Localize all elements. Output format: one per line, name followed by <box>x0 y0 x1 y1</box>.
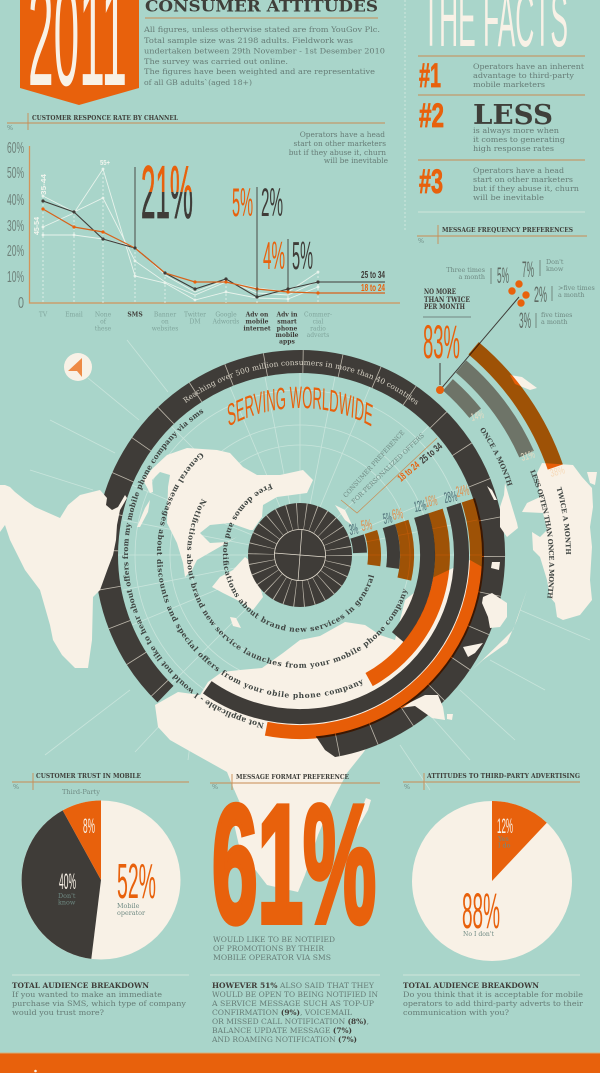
panel: customer response rate chart: Twitter <box>184 312 206 318</box>
pie chart: attitudes: I do <box>498 842 511 850</box>
panel: customer response rate chart: 30% <box>7 218 24 235</box>
panel: customer response rate chart: 2% <box>261 181 283 225</box>
pie chart: trust: 8% <box>83 815 95 838</box>
panel: message format preference: % <box>212 783 218 791</box>
title and survey notes: The figures have been weighted and are representative <box>144 67 375 76</box>
panel: message format preference: CONFIRMATION (9%), VOICEMAIL <box>212 1008 352 1017</box>
pie chart: trust: 52% <box>117 855 156 909</box>
panel: message frequency preferences: 5% <box>497 263 509 288</box>
curved chart labels: Notifictions about brand new service launches from your mobile phone company <box>186 498 408 669</box>
panel: attitudes to third-party advertising: % <box>404 783 410 791</box>
percentage labels on bars: 5% <box>382 510 394 528</box>
pie chart: trust: 40% <box>59 869 76 894</box>
curved chart labels <box>122 361 418 728</box>
panel: customer response rate chart: 20% <box>7 243 24 260</box>
panel: customer response rate chart: apps <box>279 338 295 346</box>
panel: customer response rate chart: 55+ <box>100 160 110 167</box>
consumer preference legend: 18 to 24 <box>396 460 422 484</box>
percentage labels on bars: 6% <box>391 505 405 524</box>
panel: the facts: is always more when <box>473 126 559 135</box>
panel: customer response rate chart: 40% <box>7 192 24 209</box>
panel: customer response rate chart: start on other marketers <box>294 139 386 148</box>
panel: the facts <box>418 0 585 212</box>
percentage labels on bars: 28% <box>443 488 458 507</box>
panel: the facts: #2 <box>419 97 444 135</box>
consumer preference legend <box>341 428 445 513</box>
panel: customer response rate chart: smart <box>277 318 297 326</box>
panel: the facts: #3 <box>419 163 443 201</box>
panel: customer response rate chart: on <box>161 318 169 326</box>
panel: attitudes to third-party advertising <box>403 773 583 1017</box>
panel: message frequency preferences: 38% <box>549 464 566 480</box>
pie chart: attitudes: 12% <box>497 815 513 838</box>
panel: customer response rate chart: cial <box>313 318 323 326</box>
consumer preference legend: FOR PERSONALIZED OFFERS <box>350 432 426 505</box>
panel: message frequency preferences: NO MORE <box>424 287 456 296</box>
panel: the facts: but if they abuse it, churn <box>473 184 579 193</box>
outer ring <box>107 362 494 748</box>
panel: message frequency preferences: 3% <box>519 308 531 333</box>
panel: message format preference: HOWEVER 51% ALSO SAID THAT THEY <box>212 981 374 990</box>
panel: customer response rate chart: adverts <box>307 332 329 339</box>
panel: customer trust in mobile <box>12 773 189 1017</box>
panel: customer response rate chart: 50% <box>7 165 24 182</box>
panel: customer response rate chart: Adwords <box>212 318 239 326</box>
pie chart: attitudes: 88% <box>462 883 500 939</box>
pie chart: trust <box>22 800 180 960</box>
panel: customer response rate chart: DM <box>190 318 200 326</box>
panel: customer response rate chart: phone <box>277 326 298 332</box>
panel: customer response rate chart: TV <box>39 312 48 318</box>
panel: the facts: #1 <box>419 57 441 95</box>
panel: message format preference: OF PROMOTIONS BY THEIR <box>213 944 324 953</box>
panel: message frequency preferences: know <box>546 265 564 273</box>
panel: customer response rate chart: websites <box>152 326 178 332</box>
panel: customer response rate chart: mobile <box>246 318 269 326</box>
panel: message frequency preferences: ONCE A MONTH <box>480 428 512 486</box>
panel: message frequency preferences: % <box>418 237 424 245</box>
heading: serving worldwide: SERVING WORLDWIDE <box>228 386 373 426</box>
panel: the facts: advantage to third-party <box>473 71 575 80</box>
panel: customer response rate chart: 10% <box>7 269 24 286</box>
panel: message frequency preferences: 14% <box>470 409 485 424</box>
panel: customer trust in mobile: CUSTOMER TRUST IN MOBILE <box>36 773 141 780</box>
pie chart: attitudes: No I don't <box>463 930 494 938</box>
concentric preference bars <box>207 500 477 732</box>
panel: message format preference: WOULD LIKE TO BE NOTIFIED <box>213 935 335 944</box>
panel: message frequency preferences: 7% <box>522 257 534 282</box>
panel: customer response rate chart: 35-44 <box>41 174 48 195</box>
panel: customer response rate chart: 5% <box>292 235 313 278</box>
panel: the facts: Operators have a head <box>473 166 564 175</box>
panel: message frequency preferences: a month <box>541 318 568 326</box>
panel: message format preference: AND ROAMING NOTIFICATION (7%) <box>211 1035 357 1044</box>
land overlapping the ring <box>0 483 527 775</box>
pie chart: trust: operator <box>117 909 146 917</box>
panel: the facts: it comes to generating <box>473 135 565 144</box>
panel: customer response rate chart: internet <box>243 326 271 332</box>
panel: message frequency preferences: five times <box>541 311 572 319</box>
panel: the facts: Operators have an inherent <box>473 62 584 71</box>
consumer preference legend: CONSUMER PREFERENCE <box>342 428 407 499</box>
pie chart: trust: Don't <box>58 892 76 900</box>
panel: customer response rate chart: 21% <box>141 150 193 234</box>
panel: message frequency preferences: a month <box>558 291 585 299</box>
pie chart: attitudes: Yes <box>497 835 509 843</box>
panel: customer response rate chart: None <box>95 312 112 318</box>
panel: customer response rate chart: % <box>7 124 13 132</box>
panel: customer response rate chart: radio <box>310 326 326 332</box>
percentage labels on bars: 3% <box>348 521 360 539</box>
panel: attitudes to third-party advertising: operators to add third-party adverts to their <box>403 999 583 1008</box>
percentage labels on bars: 12% <box>413 497 428 516</box>
panel: the facts: start on other marketers <box>473 175 573 184</box>
panel: message format preference: OR MISSED CALL NOTIFICATION (8%), <box>212 1017 369 1026</box>
panel: message frequency preferences: TWICE A MONTH <box>556 486 571 554</box>
panel: message frequency preferences: 31% <box>520 449 536 464</box>
panel: customer response rate chart: 45-54 <box>34 217 41 235</box>
panel: message format preference: MESSAGE FORMAT PREFERENCE <box>236 774 349 781</box>
panel: customer response rate chart: Google <box>215 312 237 318</box>
curved chart labels: General messages about discounts and special offers from your obile phone company <box>156 453 362 700</box>
panel: customer response rate chart: 4% <box>263 235 285 278</box>
compass icon <box>64 353 92 381</box>
panel: serving worldwide radial chart: 24% <box>455 482 470 501</box>
panel: the facts: high response rates <box>473 144 554 153</box>
panel: customer response rate chart: 5% <box>232 181 253 225</box>
panel: message format preference: WOULD BE OPEN TO BEING NOTIFIED IN <box>212 990 379 999</box>
panel: message frequency preferences: PER MONTH <box>424 302 465 311</box>
panel: message frequency preferences: a month <box>458 273 485 281</box>
panel: customer response rate chart: SMS <box>127 312 143 318</box>
curved chart labels: Not applicable - I would not like to hear about offers from my mobile phone company via sms <box>122 409 264 728</box>
panel: customer response rate chart: Commer- <box>304 312 332 318</box>
panel: message frequency preferences: Don't <box>546 258 564 266</box>
curved chart labels: Free demos and notifications about brand new services in general <box>222 484 374 632</box>
panel: customer trust in mobile: purchase via SMS, which type of company <box>12 999 187 1008</box>
percentage labels on bars <box>348 482 470 539</box>
title and survey notes: undertaken between 29th November - 1st Desember 2010 <box>144 46 385 56</box>
panel: the facts: LESS <box>473 100 553 131</box>
panel: customer response rate chart: 25 to 34 <box>361 270 385 281</box>
panel: customer response rate chart: Operators have a head <box>300 130 385 139</box>
panel: customer response rate chart: CUSTOMER RESPONCE RATE BY CHANNEL <box>32 115 179 122</box>
pie chart: trust: know <box>58 898 76 906</box>
panel: customer response rate chart: 21% <box>141 150 193 234</box>
panel: message format preference: MOBILE OPERATOR VIA SMS <box>213 953 331 962</box>
panel: the facts: mobile marketers <box>473 80 545 89</box>
panel: message frequency preferences: 2% <box>534 282 547 307</box>
panel: customer response rate chart: 0 <box>18 295 24 312</box>
pie chart: trust: Mobile <box>117 902 140 910</box>
panel: customer response rate chart: Adv in <box>275 312 298 318</box>
panel: customer response rate chart <box>7 113 400 346</box>
centre disc <box>248 503 352 607</box>
pie chart: attitudes <box>412 801 572 961</box>
panel: message frequency preferences: 83% <box>423 315 460 368</box>
panel: message format preference <box>210 770 380 1044</box>
title and survey notes: Total sample size was 2198 adults. Fieldwork was <box>144 36 353 45</box>
title and survey notes <box>143 0 385 87</box>
panel: attitudes to third-party advertising: Do you think that it is acceptable for mobile <box>403 990 583 999</box>
consumer preference legend: 25 to 34 <box>418 441 445 466</box>
percentage labels on bars: 5% <box>360 516 374 535</box>
world map land masses <box>137 375 597 892</box>
panel: customer response rate chart: but if they abuse it, churn <box>289 148 386 157</box>
panel: message frequency preferences: THAN TWICE <box>424 295 470 304</box>
panel: customer response rate chart: of <box>100 318 107 326</box>
map grid lines <box>30 340 590 790</box>
footer band <box>0 1052 600 1073</box>
panel: customer response rate chart: 18 to 24 <box>361 283 385 294</box>
panel: customer trust in mobile: Third-Party <box>62 788 100 796</box>
panel: customer trust in mobile: TOTAL AUDIENCE BREAKDOWN <box>12 981 149 990</box>
panel: attitudes to third-party advertising: TOTAL AUDIENCE BREAKDOWN <box>403 981 539 990</box>
panel: message frequency preferences <box>417 225 595 599</box>
panel: message format preference: A SERVICE MESSAGE SUCH AS TOP-UP <box>211 999 374 1008</box>
panel: customer trust in mobile: If you wanted to make an immediate <box>12 990 162 999</box>
panel: message frequency preferences: >five times <box>558 284 595 292</box>
panel: message frequency preferences: MESSAGE FREQUENCY PREFERENCES <box>442 227 573 234</box>
panel: message format preference: BALANCE UPDATE MESSAGE (7%) <box>212 1026 352 1035</box>
panel: serving worldwide radial chart <box>122 361 484 740</box>
percentage labels on bars: 16% <box>424 492 439 511</box>
panel: customer response rate chart: these <box>95 326 112 332</box>
panel: customer trust in mobile: % <box>13 783 19 791</box>
panel: message frequency preferences: Three times <box>446 266 485 274</box>
banner: 2011 <box>20 0 139 116</box>
title and survey notes: The survey was carried out online. <box>144 57 288 66</box>
title and survey notes: All figures, unless otherwise stated are from YouGov Plc. <box>143 25 380 34</box>
panel: customer response rate chart: 60% <box>7 140 24 157</box>
panel: attitudes to third-party advertising: communication with you? <box>403 1008 509 1017</box>
panel: customer response rate chart: Adv on <box>245 312 269 318</box>
title and survey notes: of all GB adults`(aged 18+) <box>144 78 252 87</box>
panel: attitudes to third-party advertising: ATTITUDES TO THIRD-PARTY ADVERTISING <box>426 773 580 780</box>
panel: customer response rate chart: Banner <box>154 312 176 318</box>
curved chart labels: Reaching over 500 million consumers in more than 40 countries <box>182 361 418 404</box>
panel: customer response rate chart: mobile <box>276 332 299 339</box>
panel: message frequency preferences: LESS OFTEN THAN ONCE A MONTH <box>530 469 554 599</box>
panel: customer trust in mobile: would you trust more? <box>12 1008 104 1017</box>
panel: customer response rate chart: will be inevitable <box>324 156 388 165</box>
panel: the facts: will be inevitable <box>473 193 544 202</box>
panel: customer response rate chart: Email <box>65 312 83 318</box>
text: 61% <box>212 770 376 958</box>
